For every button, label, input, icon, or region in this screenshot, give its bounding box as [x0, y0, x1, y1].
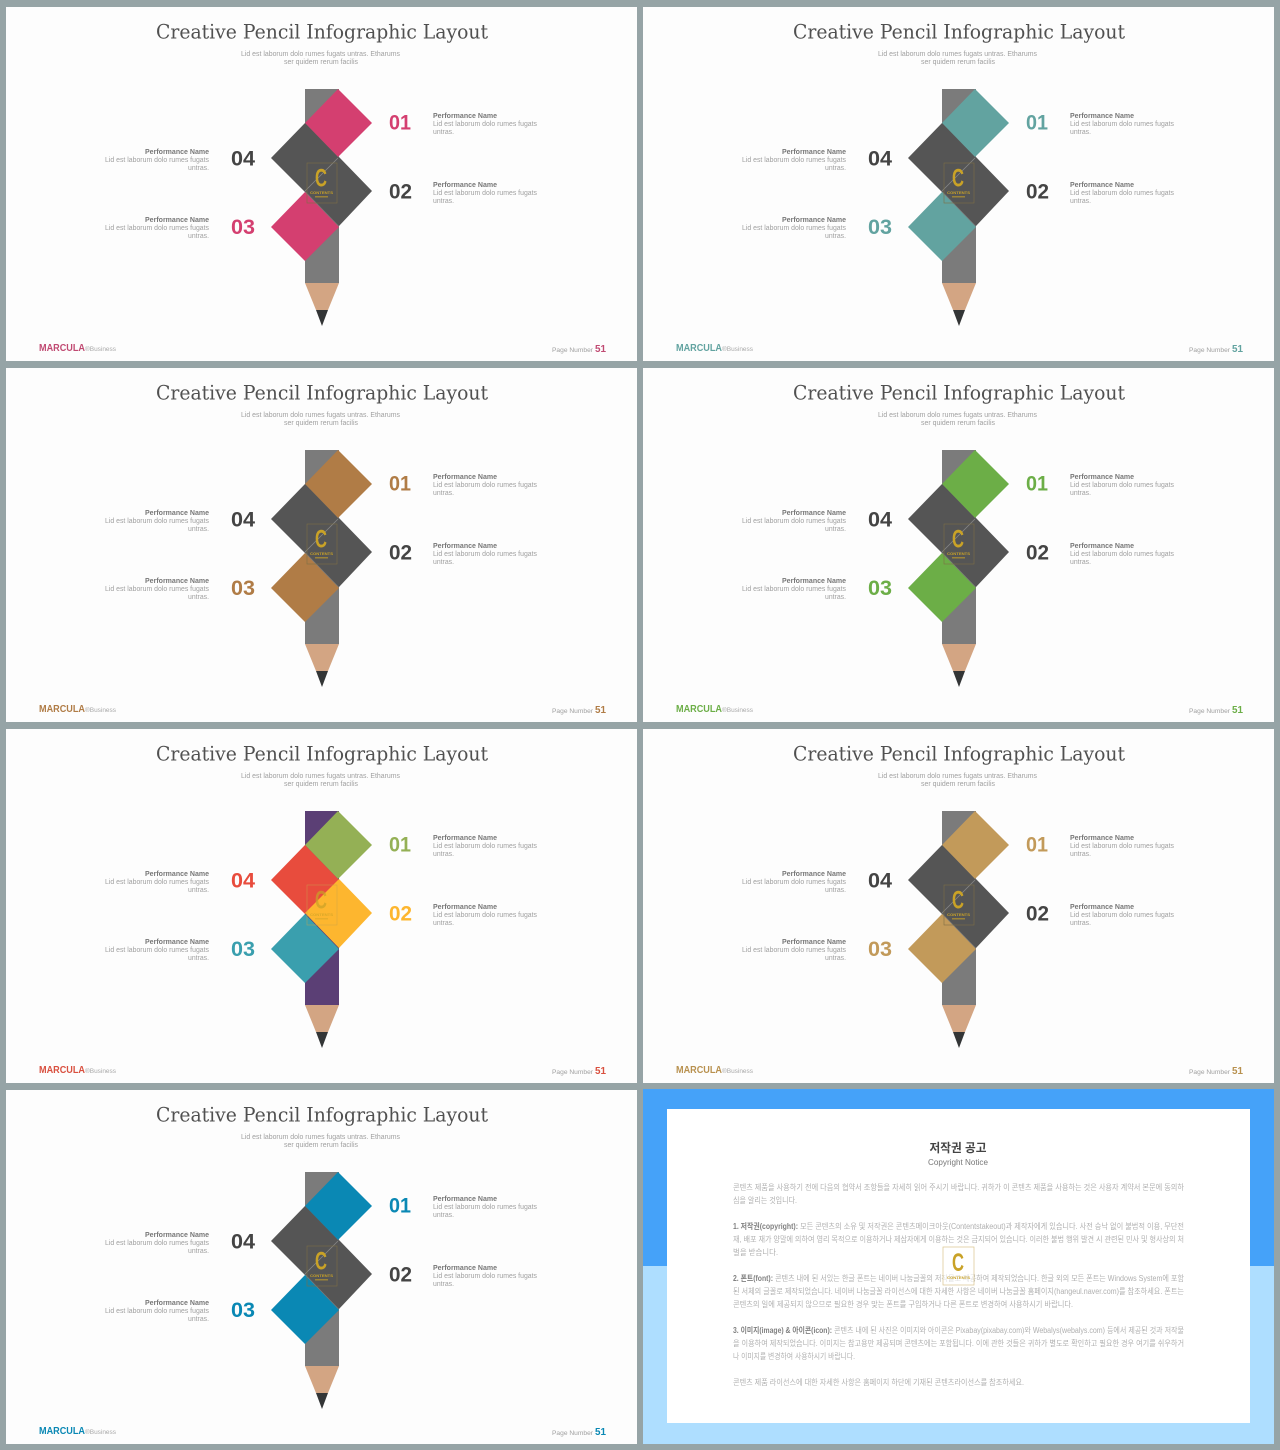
item 04: Lid est laborum dolo rumes fugats [105, 1240, 209, 1247]
title: Creative Pencil Infographic Layout [156, 1102, 488, 1126]
item 04: Lid est laborum dolo rumes fugats [105, 879, 209, 886]
item 03: 03 [868, 215, 892, 239]
item 03: untras. [188, 1316, 209, 1323]
copyright heading: 저작권 공고 [930, 1140, 986, 1155]
subtitle [241, 773, 400, 788]
intro paragraph: 콘텐츠 제품을 사용하기 전에 다음의 협약서 조항들을 자세히 읽어 주시기 바랍니다. 귀하가 이 콘텐츠 제품을 사용하는 것은 사용자 계약서 본문에 동의하 [733, 1182, 1185, 1192]
logo watermark [944, 524, 974, 564]
footer brand: ®Business [85, 1067, 117, 1075]
item 02: Performance Name [433, 1265, 497, 1272]
subtitle: ser quidem rerum facilis [921, 781, 995, 788]
diamonds [908, 89, 1009, 261]
subtitle: Lid est laborum dolo rumes fugats untras. Etharums [241, 773, 400, 780]
item 02: Lid est laborum dolo rumes fugats [433, 551, 537, 558]
copyright subheading: Copyright Notice [928, 1157, 988, 1167]
item 03: Lid est laborum dolo rumes fugats [105, 947, 209, 954]
subtitle: Lid est laborum dolo rumes fugats untras. Etharums [241, 1134, 400, 1141]
item 03: untras. [188, 233, 209, 240]
item 03: Lid est laborum dolo rumes fugats [105, 225, 209, 232]
item 03: Performance Name [145, 217, 209, 224]
item 01: Performance Name [433, 835, 497, 842]
item 03: untras. [188, 955, 209, 962]
pencil [942, 89, 976, 326]
item 02: 02 [389, 180, 412, 204]
footer brand: MARCULA [39, 1064, 85, 1076]
panel: copyright notice [643, 1089, 1274, 1444]
item 01: Performance Name [433, 474, 497, 481]
item 01: Lid est laborum dolo rumes fugats [1070, 482, 1174, 489]
item 02: Lid est laborum dolo rumes fugats [433, 912, 537, 919]
pencil [305, 89, 339, 326]
item 02: untras. [433, 198, 454, 205]
section 2: font: 콘텐츠의 일에 제공되지 않으므로 필요한 경우 맞는 폰트를 구입하거나 다른 폰트로 변경하여 사용하시기 바랍니다. [733, 1299, 1073, 1309]
footer brand [39, 703, 117, 715]
item 02 [389, 902, 537, 927]
item 01: Lid est laborum dolo rumes fugats [433, 482, 537, 489]
item 03: Lid est laborum dolo rumes fugats [742, 225, 846, 232]
panel: blue pencil slide [6, 1090, 637, 1444]
item 04: untras. [825, 887, 846, 894]
logo watermark: CONTENTS [947, 912, 970, 917]
subtitle: Lid est laborum dolo rumes fugats untras. Etharums [241, 412, 400, 419]
item 01: Performance Name [433, 1196, 497, 1203]
closing note: 콘텐츠 제품 라이선스에 대한 자세한 사항은 홈페이지 하단에 기재된 콘텐츠라이선스를 참조하세요. [733, 1377, 1024, 1387]
item 02 [389, 540, 537, 566]
item 04: 04 [868, 868, 892, 892]
item 02: untras. [433, 1281, 454, 1288]
item 01: Performance Name [1070, 474, 1134, 481]
page number [552, 1066, 606, 1077]
footer brand [39, 1064, 117, 1076]
item 03: Lid est laborum dolo rumes fugats [742, 947, 846, 954]
footer brand: ®Business [85, 345, 117, 353]
logo watermark: CONTENTS [310, 551, 333, 556]
item 01 [389, 472, 537, 497]
intro paragraph [733, 1182, 1185, 1205]
footer brand: MARCULA [676, 1064, 722, 1076]
item 03 [742, 576, 892, 601]
item 02 [389, 180, 537, 205]
item 02: untras. [1070, 559, 1091, 566]
logo watermark [307, 163, 337, 203]
diamonds [908, 450, 1009, 622]
subtitle: ser quidem rerum facilis [284, 781, 358, 788]
item 03: 03 [231, 1298, 255, 1322]
item 01: 01 [389, 832, 411, 856]
item 04 [742, 868, 892, 894]
footer brand: ®Business [722, 1067, 754, 1075]
logo watermark [943, 1247, 974, 1285]
item 01 [389, 832, 537, 858]
item 04: Performance Name [145, 871, 209, 878]
item 03: Lid est laborum dolo rumes fugats [105, 586, 209, 593]
item 01 [389, 110, 537, 136]
item 02: 02 [389, 902, 412, 926]
pencil [305, 811, 339, 1048]
panel: teal pencil slide [643, 7, 1274, 361]
item 01: untras. [1070, 851, 1091, 858]
item 04: Lid est laborum dolo rumes fugats [105, 157, 209, 164]
item 04: untras. [825, 526, 846, 533]
item 01: untras. [1070, 129, 1091, 136]
subtitle [241, 412, 400, 427]
logo watermark: C [952, 1249, 964, 1277]
title: Creative Pencil Infographic Layout [156, 20, 488, 44]
page number: 51 [595, 1066, 606, 1077]
title: Creative Pencil Infographic Layout [793, 380, 1125, 404]
item 03: Performance Name [782, 939, 846, 946]
page number: Page Number [1189, 1069, 1231, 1076]
title: Creative Pencil Infographic Layout [793, 20, 1125, 44]
item 04 [105, 1230, 255, 1255]
item 01: Lid est laborum dolo rumes fugats [433, 843, 537, 850]
item 01: Performance Name [1070, 835, 1134, 842]
footer brand [39, 342, 117, 354]
subtitle: ser quidem rerum facilis [284, 59, 358, 66]
logo watermark: CONTENTS [310, 912, 333, 917]
item 04 [742, 146, 892, 172]
item 01: 01 [389, 1194, 411, 1218]
page number: Page Number [552, 1069, 594, 1076]
item 04: 04 [231, 508, 255, 532]
subtitle [878, 773, 1037, 788]
item 02: Performance Name [1070, 904, 1134, 911]
item 01: 01 [1026, 110, 1048, 134]
section 1: copyright: 모든 콘텐츠의 소유 및 저작권은 콘텐츠메이크아웃(Contentstakeout)과 제작자에게 있습니다. 사전 승낙 없이 불법적 이용, 무단전 [800, 1221, 1184, 1231]
section 3: image and icon [733, 1325, 1184, 1361]
page number [552, 344, 606, 355]
subtitle: ser quidem rerum facilis [284, 1142, 358, 1149]
logo watermark: CONTENTS [947, 551, 970, 556]
logo watermark [944, 163, 974, 203]
item 02: Lid est laborum dolo rumes fugats [1070, 551, 1174, 558]
item 02: Lid est laborum dolo rumes fugats [433, 1273, 537, 1280]
item 04: 04 [868, 508, 892, 532]
item 01: 01 [1026, 832, 1048, 856]
diamonds [271, 811, 372, 983]
page number: 51 [1232, 1066, 1243, 1077]
item 04 [105, 508, 255, 533]
subtitle [878, 412, 1037, 427]
title: Creative Pencil Infographic Layout [793, 742, 1125, 766]
diamonds [271, 89, 372, 261]
item 03: Performance Name [145, 578, 209, 585]
section 2: font: 된 서체의 글꼴로 제작되었습니다. 네이버 나눔글꼴 라이선스에 대한 자세한 사항은 네이버 나눔글꼴 홈페이지(hangeul.naver.com)를 참조하세요. 폰트는 [733, 1286, 1184, 1296]
page number: 51 [595, 705, 606, 716]
item 03: Performance Name [782, 578, 846, 585]
item 04 [105, 146, 255, 172]
item 03: Performance Name [782, 217, 846, 224]
logo watermark: C [315, 886, 327, 914]
footer brand: MARCULA [39, 342, 85, 354]
footer brand [676, 1064, 754, 1076]
item 02: 02 [389, 540, 412, 564]
footer brand: ®Business [722, 706, 754, 714]
page number: Page Number [552, 1430, 594, 1437]
footer brand [676, 342, 754, 354]
item 04: Lid est laborum dolo rumes fugats [742, 518, 846, 525]
logo watermark [307, 885, 337, 925]
panel: pink pencil slide [6, 7, 637, 361]
section 1: copyright [733, 1221, 1184, 1257]
logo watermark: CONTENTS [310, 1273, 333, 1278]
item 02: Performance Name [1070, 182, 1134, 189]
page number: 51 [595, 344, 606, 355]
section 2: font [733, 1273, 1185, 1309]
pencil [942, 811, 976, 1048]
logo watermark: C [952, 526, 964, 554]
footer brand: MARCULA [676, 342, 722, 354]
page number: 51 [595, 1427, 606, 1438]
subtitle [241, 1134, 400, 1149]
item 04: Lid est laborum dolo rumes fugats [742, 879, 846, 886]
item 03: untras. [825, 955, 846, 962]
item 02 [1026, 180, 1174, 205]
item 01: 01 [1026, 472, 1048, 496]
footer brand: ®Business [85, 706, 117, 714]
diamonds [271, 1172, 372, 1344]
subtitle: ser quidem rerum facilis [284, 420, 358, 427]
item 03 [105, 937, 255, 962]
item 01: untras. [433, 851, 454, 858]
item 01: untras. [433, 490, 454, 497]
footer brand: ®Business [722, 345, 754, 353]
item 03: Lid est laborum dolo rumes fugats [742, 586, 846, 593]
item 02: 02 [389, 1262, 412, 1286]
logo watermark: CONTENTS [310, 190, 333, 195]
diamonds [908, 811, 1009, 983]
item 01: untras. [1070, 490, 1091, 497]
page number: Page Number [1189, 708, 1231, 715]
subtitle: Lid est laborum dolo rumes fugats untras. Etharums [878, 51, 1037, 58]
footer brand: MARCULA [39, 703, 85, 715]
item 01 [389, 1194, 537, 1219]
logo watermark: C [315, 1248, 327, 1276]
item 04: untras. [188, 1248, 209, 1255]
logo watermark: CONTENTS [947, 190, 970, 195]
item 04: Performance Name [145, 1232, 209, 1239]
panel: tan pencil slide [643, 729, 1274, 1083]
item 03: Lid est laborum dolo rumes fugats [105, 1308, 209, 1315]
footer brand: ®Business [85, 1428, 117, 1436]
section 3: image and icon: 나 이미지를 변경하여 사용하시기 바랍니다. [733, 1351, 855, 1361]
pencil [305, 450, 339, 687]
item 04: untras. [188, 165, 209, 172]
item 01: Performance Name [1070, 113, 1134, 120]
item 04: 04 [231, 1230, 255, 1254]
item 04: 04 [231, 146, 255, 170]
section 1: copyright: 벌을 받습니다. [733, 1247, 778, 1257]
item 04: Performance Name [782, 510, 846, 517]
logo watermark: CONTENTS [947, 1275, 970, 1280]
item 02: Performance Name [433, 543, 497, 550]
item 03: 03 [868, 937, 892, 961]
item 01 [1026, 472, 1174, 497]
item 04: Performance Name [145, 510, 209, 517]
item 01: untras. [433, 1212, 454, 1219]
page number: Page Number [552, 347, 594, 354]
item 01: 01 [389, 110, 411, 134]
item 04: Performance Name [782, 871, 846, 878]
item 02: untras. [1070, 920, 1091, 927]
item 03 [105, 576, 255, 601]
subtitle: Lid est laborum dolo rumes fugats untras. Etharums [878, 412, 1037, 419]
item 04: Lid est laborum dolo rumes fugats [105, 518, 209, 525]
subtitle: Lid est laborum dolo rumes fugats untras. Etharums [241, 51, 400, 58]
section 2: font: 2. 폰트(font): [733, 1274, 773, 1283]
item 01 [1026, 832, 1174, 858]
logo watermark: C [315, 526, 327, 554]
panel: multicolour pencil slide [6, 729, 637, 1083]
subtitle [241, 51, 400, 66]
section 2: font: 콘텐츠 내에 된 서있는 한글 폰트는 네이버 나눔글꼴의 저작물로 제공하여 제작되었습니다. 한글 외의 모든 폰트는 Windows System에 포함 [775, 1273, 1185, 1283]
pencil [305, 1172, 339, 1409]
intro paragraph: 심을 알리는 것입니다. [733, 1195, 797, 1205]
item 04: untras. [188, 887, 209, 894]
subtitle: ser quidem rerum facilis [921, 420, 995, 427]
item 03 [742, 937, 892, 962]
item 03 [742, 215, 892, 240]
item 02: Lid est laborum dolo rumes fugats [1070, 190, 1174, 197]
page number [552, 705, 606, 716]
item 02: Lid est laborum dolo rumes fugats [433, 190, 537, 197]
item 03 [105, 215, 255, 240]
item 01: Performance Name [433, 113, 497, 120]
item 03: 03 [231, 937, 255, 961]
item 02: untras. [433, 559, 454, 566]
item 01: Lid est laborum dolo rumes fugats [433, 121, 537, 128]
item 01 [1026, 110, 1174, 136]
item 04: 04 [231, 868, 255, 892]
item 04: Performance Name [782, 149, 846, 156]
page number: 51 [1232, 705, 1243, 716]
logo watermark: C [315, 164, 327, 192]
item 04 [742, 508, 892, 533]
title: Creative Pencil Infographic Layout [156, 380, 488, 404]
item 03: 03 [231, 576, 255, 600]
item 03: Performance Name [145, 1300, 209, 1307]
item 02: Performance Name [433, 182, 497, 189]
item 04: untras. [825, 165, 846, 172]
item 02: 02 [1026, 902, 1049, 926]
item 03: untras. [825, 594, 846, 601]
item 02 [1026, 540, 1174, 566]
footer brand [39, 1425, 117, 1437]
item 01: 01 [389, 472, 411, 496]
logo watermark: C [952, 886, 964, 914]
page number: 51 [1232, 344, 1243, 355]
section 1: copyright: 1. 저작권(copyright): [733, 1221, 798, 1231]
item 04: Lid est laborum dolo rumes fugats [742, 157, 846, 164]
logo watermark [944, 885, 974, 925]
title: Creative Pencil Infographic Layout [156, 742, 488, 766]
logo watermark: C [952, 164, 964, 192]
page number: Page Number [1189, 347, 1231, 354]
page number [1189, 1066, 1243, 1077]
item 01: untras. [433, 129, 454, 136]
item 02: Lid est laborum dolo rumes fugats [1070, 912, 1174, 919]
section 3: image and icon: 3. 이미지(image) & 아이콘(icon): [733, 1325, 832, 1335]
section 3: image and icon: 을 이용하여 제작되었습니다. 이미지는 참고용만 제공되며 콘텐츠에는 포함됩니다. 이에 관한 것들은 귀하가 별도로 확인하고 필요한 경우 여기를 쉬우하거 [733, 1338, 1184, 1348]
logo watermark [307, 524, 337, 564]
item 04: untras. [188, 526, 209, 533]
subtitle: Lid est laborum dolo rumes fugats untras. Etharums [878, 773, 1037, 780]
pencil [942, 450, 976, 687]
item 02: 02 [1026, 540, 1049, 564]
panel: brown pencil slide [6, 368, 637, 722]
item 03: untras. [825, 233, 846, 240]
item 01: Lid est laborum dolo rumes fugats [1070, 121, 1174, 128]
panel: green pencil slide [643, 368, 1274, 722]
item 01: Lid est laborum dolo rumes fugats [1070, 843, 1174, 850]
section 3: image and icon: 콘텐츠 내에 된 사진은 이미지와 아이콘은 Pixabay(pixabay.com)와 Webalys(webalys.com) 등에서 제공된 것과 저작물 [834, 1325, 1184, 1335]
page number [1189, 705, 1243, 716]
subtitle [878, 51, 1037, 66]
item 04 [105, 868, 255, 894]
item 03: Performance Name [145, 939, 209, 946]
page number [552, 1427, 606, 1438]
footer brand: MARCULA [676, 703, 722, 715]
subtitle: ser quidem rerum facilis [921, 59, 995, 66]
section 1: copyright: 재, 배포 재가 양말에 의하여 영리 목적으로 이용하거나 제삼자에게 이용하는 것은 금지되어 있습니다. 이러한 불법 행위 발견 시 관련된 민사 및 형사상의 처 [733, 1234, 1184, 1244]
page number [1189, 344, 1243, 355]
item 03: 03 [231, 215, 255, 239]
item 02: untras. [433, 920, 454, 927]
item 02: 02 [1026, 180, 1049, 204]
item 03: untras. [188, 594, 209, 601]
item 04: Performance Name [145, 149, 209, 156]
item 02 [389, 1262, 537, 1288]
footer brand: MARCULA [39, 1425, 85, 1437]
footer brand [676, 703, 754, 715]
item 01: Lid est laborum dolo rumes fugats [433, 1204, 537, 1211]
item 03 [105, 1298, 255, 1323]
logo watermark [307, 1246, 337, 1286]
item 04: 04 [868, 146, 892, 170]
diamonds [271, 450, 372, 622]
item 02: untras. [1070, 198, 1091, 205]
item 02: Performance Name [1070, 543, 1134, 550]
item 03: 03 [868, 576, 892, 600]
item 02 [1026, 902, 1174, 927]
item 02: Performance Name [433, 904, 497, 911]
page number: Page Number [552, 708, 594, 715]
